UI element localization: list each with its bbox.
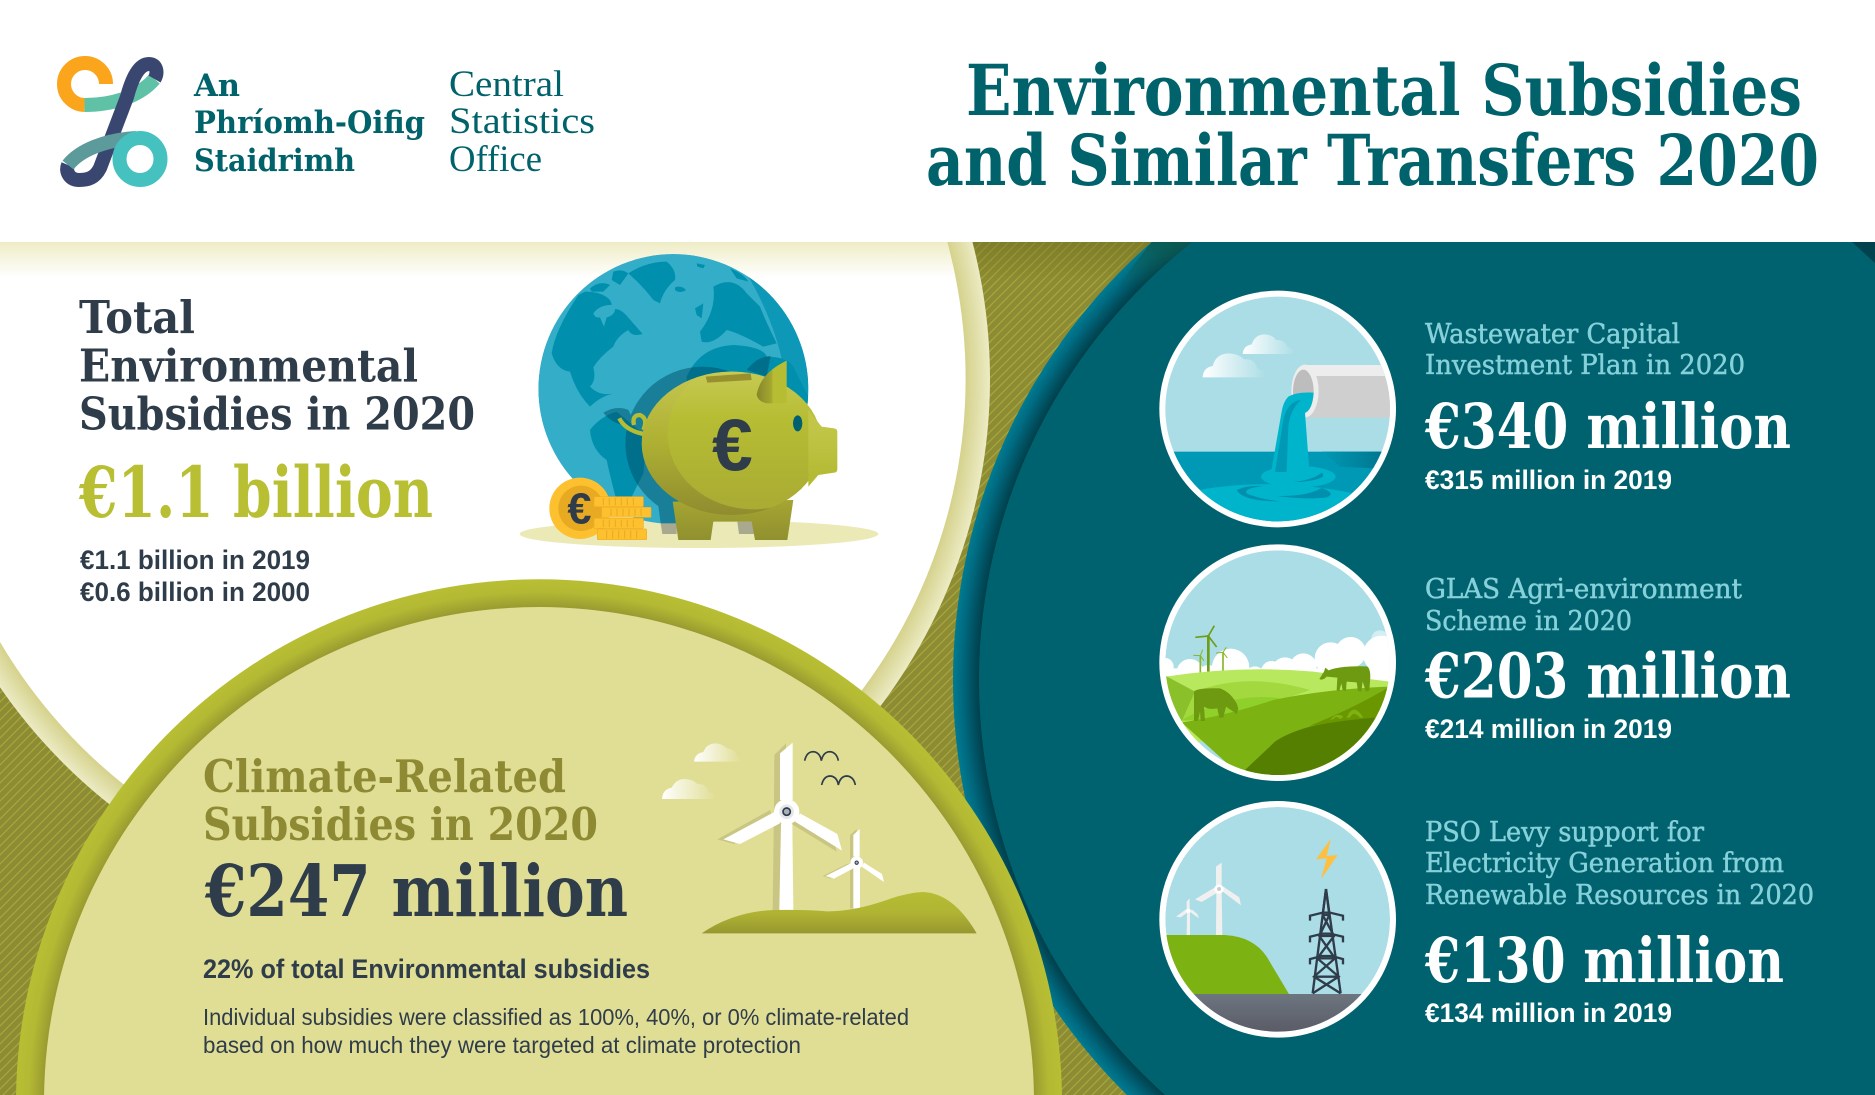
header background <box>0 0 1875 242</box>
GLAS figure: €203 million <box>1424 640 1791 712</box>
GLAS heading: GLAS Agri-environment <box>1425 574 1742 605</box>
pipe <box>1305 365 1392 418</box>
background circles <box>0 242 1875 1095</box>
icon: wastewater pipe <box>1159 291 1397 533</box>
heading: total environmental subsidies: Total <box>79 291 195 344</box>
icon: electricity <box>1159 801 1397 1038</box>
comparison figures: €1.1 billion in 2019 <box>80 545 310 575</box>
clouds <box>1371 630 1387 639</box>
logo English name <box>449 64 595 180</box>
wastewater 2019: €315 million in 2019 <box>1425 465 1672 495</box>
panel: climate related circle <box>16 579 1062 1095</box>
text: PSO levy <box>1424 817 1814 1028</box>
leg shadows <box>661 522 755 534</box>
GLAS heading <box>1425 574 1742 637</box>
wastewater heading <box>1425 319 1745 381</box>
heading: total environmental subsidies: Subsidies in 2020 <box>79 388 475 440</box>
climate note: Individual subsidies were classified as 100%, 40%, or 0% climate-related <box>203 1004 909 1030</box>
logo mark <box>64 63 160 180</box>
logo Irish name: Staidrimh <box>194 143 355 179</box>
hills <box>1166 669 1390 742</box>
globe <box>538 254 808 524</box>
pig shadow <box>603 356 780 523</box>
PSO 2019: €134 million in 2019 <box>1425 998 1672 1028</box>
total figure: €1.1 billion <box>78 451 433 534</box>
logo English name: Central <box>449 64 564 105</box>
wastewater figure: €340 million <box>1424 390 1791 463</box>
hill <box>1160 935 1289 995</box>
icon: wind turbines <box>662 743 977 933</box>
logo English name: Office <box>449 139 542 180</box>
PSO figure: €130 million <box>1424 924 1784 997</box>
hatched background <box>0 242 1152 1095</box>
logo English name: Statistics <box>449 101 595 142</box>
climate note: based on how much they were targeted at climate protection <box>203 1032 801 1058</box>
text: GLAS <box>1424 574 1791 744</box>
PSO heading: Electricity Generation from <box>1425 848 1784 879</box>
cows <box>1194 666 1370 721</box>
piggy bank: € <box>712 405 753 487</box>
comparison figures: €0.6 billion in 2000 <box>80 577 310 607</box>
logo <box>64 63 595 180</box>
logo Irish name: Phríomh-Oifig <box>194 105 425 141</box>
climate figure: €247 million <box>204 849 628 933</box>
title <box>926 49 1819 202</box>
panel: subsidy breakdown circle <box>953 242 1875 1095</box>
climate note <box>203 1004 909 1058</box>
continents <box>552 262 808 520</box>
logo Irish name <box>193 68 425 179</box>
PSO heading: Renewable Resources in 2020 <box>1425 880 1814 911</box>
PSO heading <box>1425 817 1814 911</box>
turbines <box>1176 863 1241 937</box>
lightning bolt <box>1316 838 1338 879</box>
heading: climate-related subsidies: Climate-Related <box>203 750 566 803</box>
birds <box>805 752 855 785</box>
turbine shadows <box>717 743 857 910</box>
GLAS 2019: €214 million in 2019 <box>1425 714 1672 744</box>
heading: climate-related subsidies: Subsidies in 2020 <box>203 798 598 851</box>
hill <box>702 892 977 933</box>
panel: total subsidies circle <box>0 242 990 804</box>
coins <box>549 478 651 540</box>
wastewater heading: Wastewater Capital <box>1425 319 1680 350</box>
pylon <box>1309 889 1344 993</box>
icon: farmland <box>1156 544 1400 792</box>
comparison figures <box>80 545 310 607</box>
water stream <box>1271 392 1314 473</box>
small turbines <box>1193 626 1227 673</box>
icon: globe and piggy bank <box>520 254 878 548</box>
clouds <box>694 743 741 762</box>
PSO heading: PSO Levy support for <box>1425 817 1704 848</box>
clouds <box>1203 353 1266 377</box>
coins: € <box>567 486 591 534</box>
heading: total environmental subsidies: Environmental <box>79 340 418 392</box>
piggy bank <box>619 359 839 540</box>
turbines <box>723 743 884 910</box>
ground shadow <box>520 520 878 548</box>
heading: total environmental subsidies <box>79 291 475 440</box>
climate share: 22% of total Environmental subsidies <box>203 954 650 984</box>
text: wastewater <box>1424 319 1791 495</box>
sea <box>1174 452 1382 522</box>
logo Irish name: An <box>193 68 240 104</box>
wastewater heading: Investment Plan in 2020 <box>1425 350 1745 381</box>
GLAS heading: Scheme in 2020 <box>1425 606 1632 637</box>
road <box>1194 994 1362 1032</box>
heading: climate-related subsidies <box>203 750 598 851</box>
